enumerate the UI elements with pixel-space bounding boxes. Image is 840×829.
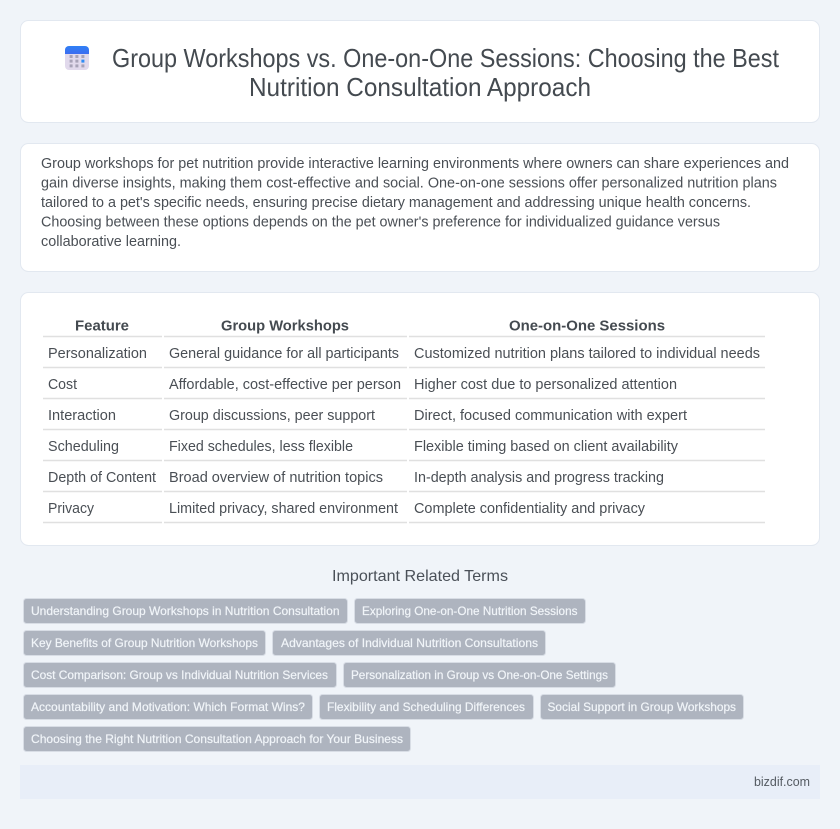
tag: Choosing the Right Nutrition Consultation Approach for Your Business: [31, 732, 403, 746]
heading: important related terms: Important Related Terms: [332, 568, 508, 585]
table row: cost: [48, 377, 677, 393]
table header: [75, 318, 665, 334]
table row: personalization: Personalization: [48, 346, 147, 362]
tag: Exploring One-on-One Nutrition Sessions: [362, 604, 578, 618]
tag: Accountability and Motivation: Which Format Wins?: [31, 700, 305, 714]
table row: interaction: Direct, focused communication with expert: [414, 408, 687, 424]
table row: scheduling: Scheduling: [48, 439, 119, 455]
table row: interaction: [48, 408, 687, 424]
tag: Flexibility and Scheduling Differences: [327, 700, 525, 714]
table row: personalization: [48, 346, 760, 362]
table header: Group Workshops: [221, 318, 349, 334]
tag: Personalization in Group vs One-on-One Settings: [351, 668, 608, 682]
table row: personalization: Customized nutrition plans tailored to individual needs: [414, 346, 760, 362]
text block: introduction paragraph: Group workshops for pet nutrition provide interactive learning environments where owners can share experiences and: [41, 156, 789, 172]
tag: [24, 694, 312, 720]
table header: Feature: [75, 318, 129, 334]
footer: bizdif.com: [754, 774, 810, 789]
title: Group Workshops vs. One-on-One Sessions: Choosing the Best: [112, 45, 779, 73]
table row: privacy: [48, 501, 646, 517]
table row: interaction: Group discussions, peer support: [169, 408, 375, 424]
tag: [272, 630, 546, 656]
tag: Understanding Group Workshops in Nutrition Consultation: [31, 604, 340, 618]
table row: privacy: Limited privacy, shared environment: [169, 501, 398, 517]
text block: introduction paragraph: [41, 156, 789, 250]
panel: title header: [20, 20, 820, 122]
table row: scheduling: Fixed schedules, less flexible: [169, 439, 353, 455]
text block: introduction paragraph: Choosing between these options depends on the pet owner's preference for individualized guidance versus: [41, 214, 720, 230]
tag: [344, 662, 616, 688]
tag: [24, 630, 266, 656]
tag: [24, 662, 336, 688]
tag: [24, 726, 410, 752]
table row: cost: Higher cost due to personalized attention: [414, 377, 677, 393]
tag: [540, 694, 744, 720]
table row: cost: Affordable, cost-effective per person: [169, 377, 401, 393]
table row: personalization: General guidance for all participants: [169, 346, 399, 362]
tag: [24, 598, 348, 624]
tag: Advantages of Individual Nutrition Consultations: [281, 636, 538, 650]
tag: [354, 598, 586, 624]
table header: One-on-One Sessions: [509, 318, 665, 334]
tag: Social Support in Group Workshops: [548, 700, 736, 714]
tag: [320, 694, 534, 720]
table row: interaction: Interaction: [48, 408, 116, 424]
title: Nutrition Consultation Approach: [249, 74, 591, 102]
title: [112, 45, 779, 102]
table row: scheduling: [48, 439, 679, 455]
panel: comparison table: [20, 292, 820, 546]
table row: cost: Cost: [48, 377, 77, 393]
footer: [20, 765, 820, 799]
table row: scheduling: Flexible timing based on client availability: [414, 439, 679, 455]
table row: depth of content: [48, 470, 664, 486]
panel: introduction: [20, 144, 820, 272]
tag: Cost Comparison: Group vs Individual Nutrition Services: [31, 668, 328, 682]
table row: depth of content: In-depth analysis and progress tracking: [414, 470, 664, 486]
table row: privacy: Complete confidentiality and privacy: [414, 501, 646, 517]
tag: Key Benefits of Group Nutrition Workshops: [31, 636, 258, 650]
icon: calendar: [65, 46, 89, 70]
text block: introduction paragraph: gain diverse insights, making them cost-effective and social. One-on-one sessions offer personalized nutrition plans: [41, 176, 777, 192]
text block: introduction paragraph: tailored to a pet's specific needs, ensuring precise dietary management and addressing unique health concerns.: [41, 195, 751, 211]
related term tags: [24, 598, 744, 752]
table row: privacy: Privacy: [48, 501, 95, 517]
text block: introduction paragraph: collaborative learning.: [41, 234, 181, 250]
table row: depth of content: Depth of Content: [48, 470, 156, 486]
table row: depth of content: Broad overview of nutrition topics: [169, 470, 383, 486]
